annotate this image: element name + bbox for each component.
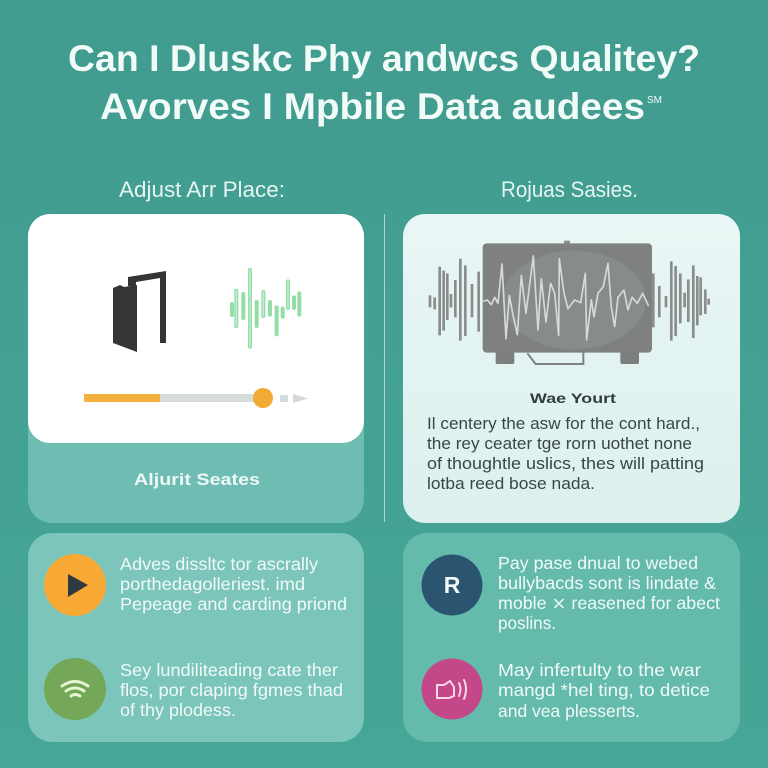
icon: letter R badge — [422, 554, 482, 616]
title: Can I Dluskc Phy andwcs Qualitey? — [68, 38, 700, 79]
icon: wifi signal — [44, 658, 106, 720]
panel body text: the rey ceater tge rorn uothet none — [427, 435, 692, 453]
title: SM — [647, 95, 662, 106]
tip text: wifi: flos, por claping fgmes thad — [120, 680, 343, 700]
panel subheading: Wae Yourt — [530, 390, 616, 406]
tip text: R: bullybacds sont is lindate & — [498, 573, 716, 593]
tip text: wifi: Sey lundiliteading cate ther — [120, 660, 338, 680]
panel body text: Il centery the asw for the cont hard., — [427, 415, 700, 433]
tip text: R: poslins. — [498, 613, 556, 633]
panel: audio device — [403, 214, 740, 523]
tip text: speaker: and vea plesserts. — [498, 701, 640, 721]
icon: play button — [44, 554, 106, 616]
panel body text: lotba reed bose nada. — [427, 475, 595, 493]
title: Avorves I Mpbile Data audees — [100, 86, 645, 127]
tip text: speaker — [498, 660, 710, 721]
slider control — [84, 388, 308, 408]
tip text: play: porthedagolleriest. imd — [120, 574, 305, 594]
tip text: play — [120, 554, 347, 614]
panel: left tips — [28, 533, 364, 742]
panel: adjust placement — [28, 214, 364, 523]
tip text: R: Pay pase dnual to webed — [498, 553, 698, 573]
tip text: speaker: mangd *hel ting, to detice — [498, 680, 710, 700]
tip text: speaker: May infertulty to the war — [498, 660, 701, 680]
tip text: R — [498, 553, 720, 633]
panel caption: Aljurit Seates — [134, 470, 260, 489]
panel body text — [427, 415, 704, 493]
icon: green sound wave — [232, 270, 299, 347]
heading: left column: Adjust Arr Place: — [119, 177, 285, 202]
icon: speaker sound — [422, 658, 482, 720]
heading: right column: Rojuas Sasies. — [501, 177, 638, 202]
icon: speaker box with waveform — [430, 241, 709, 364]
panel body text: of thoughtle uslics, thes will patting — [427, 455, 704, 473]
panel: right tips — [403, 533, 740, 742]
tip text: wifi — [120, 660, 343, 720]
icon: open door — [113, 271, 166, 352]
icon: letter R badge: R — [444, 572, 461, 598]
title — [68, 38, 700, 127]
tip text: play: Pepeage and carding priond — [120, 594, 347, 614]
tip text: R: moble ⨯ reasened for abect — [498, 593, 720, 613]
tip text: wifi: of thy plodess. — [120, 700, 236, 720]
tip text: play: Adves dissltc tor ascrally — [120, 554, 318, 574]
